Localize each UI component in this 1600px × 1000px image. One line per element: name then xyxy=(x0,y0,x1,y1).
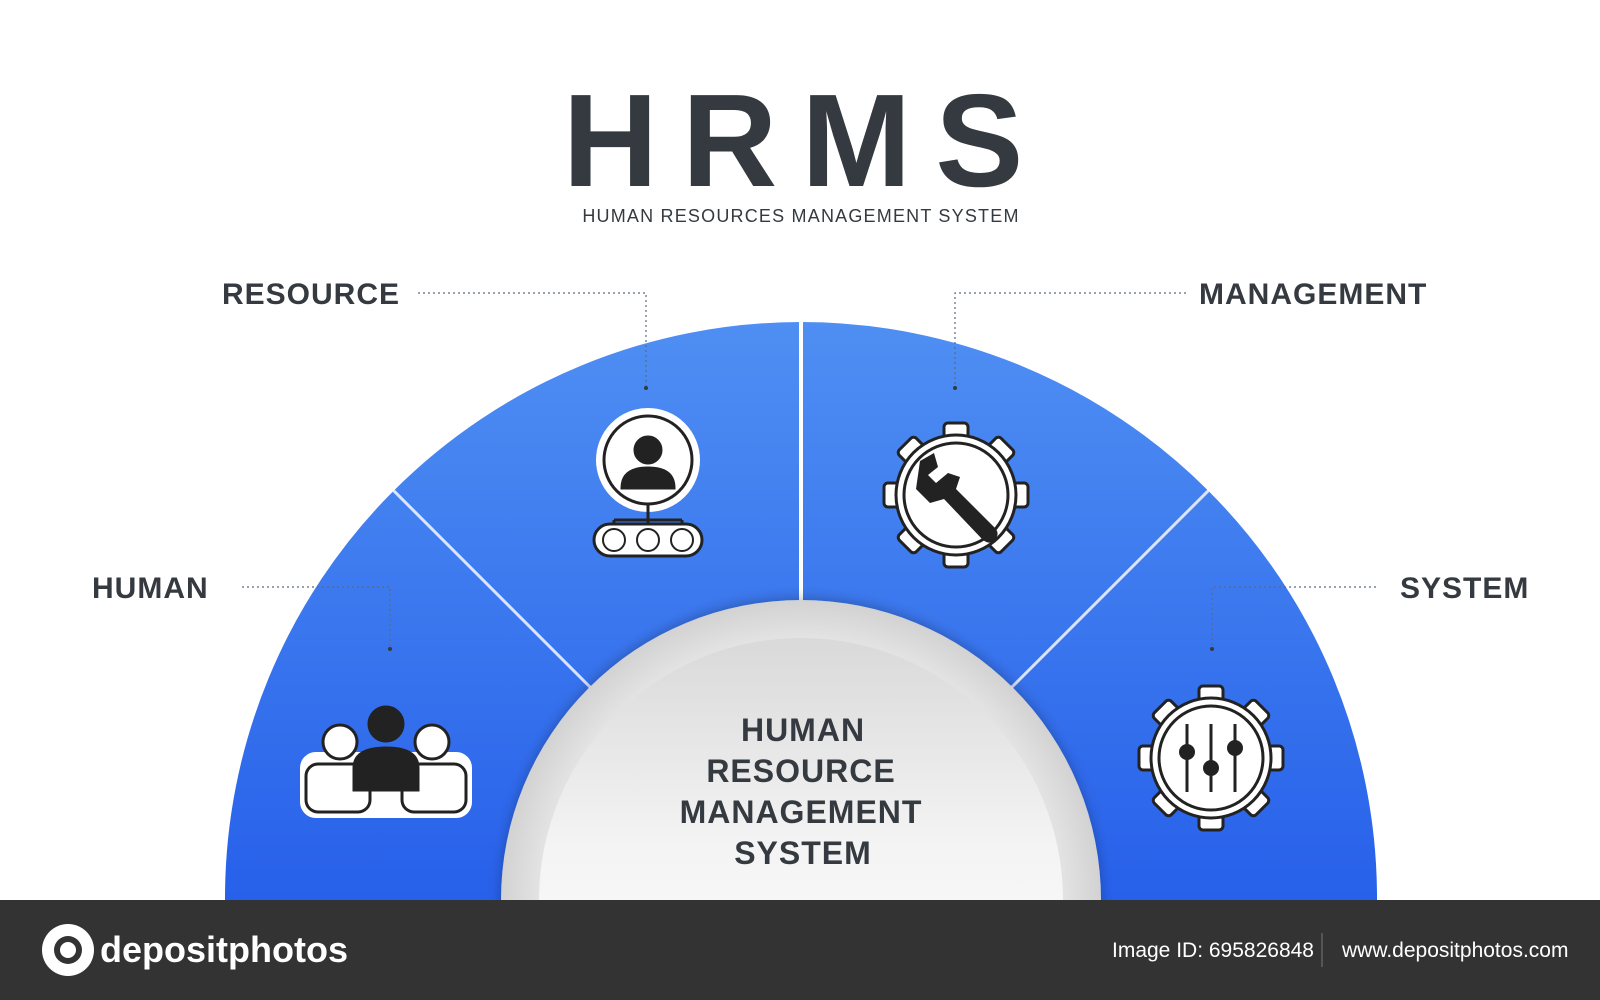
labels: RESOURCE xyxy=(222,278,400,311)
center text: SYSTEM xyxy=(734,835,872,871)
subtitle: HUMAN RESOURCES MANAGEMENT SYSTEM xyxy=(582,206,1020,226)
bottom bar: Image ID: 695826848 xyxy=(1112,939,1314,962)
icon: system gear xyxy=(1139,686,1283,830)
labels: MANAGEMENT xyxy=(1199,278,1427,311)
center text: RESOURCE xyxy=(706,753,896,789)
labels: SYSTEM xyxy=(1400,572,1529,605)
title: HRMS xyxy=(563,67,1047,214)
bottom bar: www.depositphotos.com xyxy=(1341,939,1568,962)
center text xyxy=(680,712,922,871)
semicircle wedges xyxy=(225,322,1377,900)
icon: gear wrench xyxy=(884,423,1028,567)
bottom bar xyxy=(0,900,1600,1000)
icon: human group xyxy=(304,707,468,814)
leader lines xyxy=(242,293,1376,649)
labels xyxy=(92,278,1529,605)
labels: HUMAN xyxy=(92,572,209,605)
center text: HUMAN xyxy=(741,712,865,748)
icon: resource org xyxy=(594,412,702,556)
bottom bar: depositphotos xyxy=(100,929,348,970)
center circle xyxy=(495,592,1107,900)
center text: MANAGEMENT xyxy=(680,794,922,830)
